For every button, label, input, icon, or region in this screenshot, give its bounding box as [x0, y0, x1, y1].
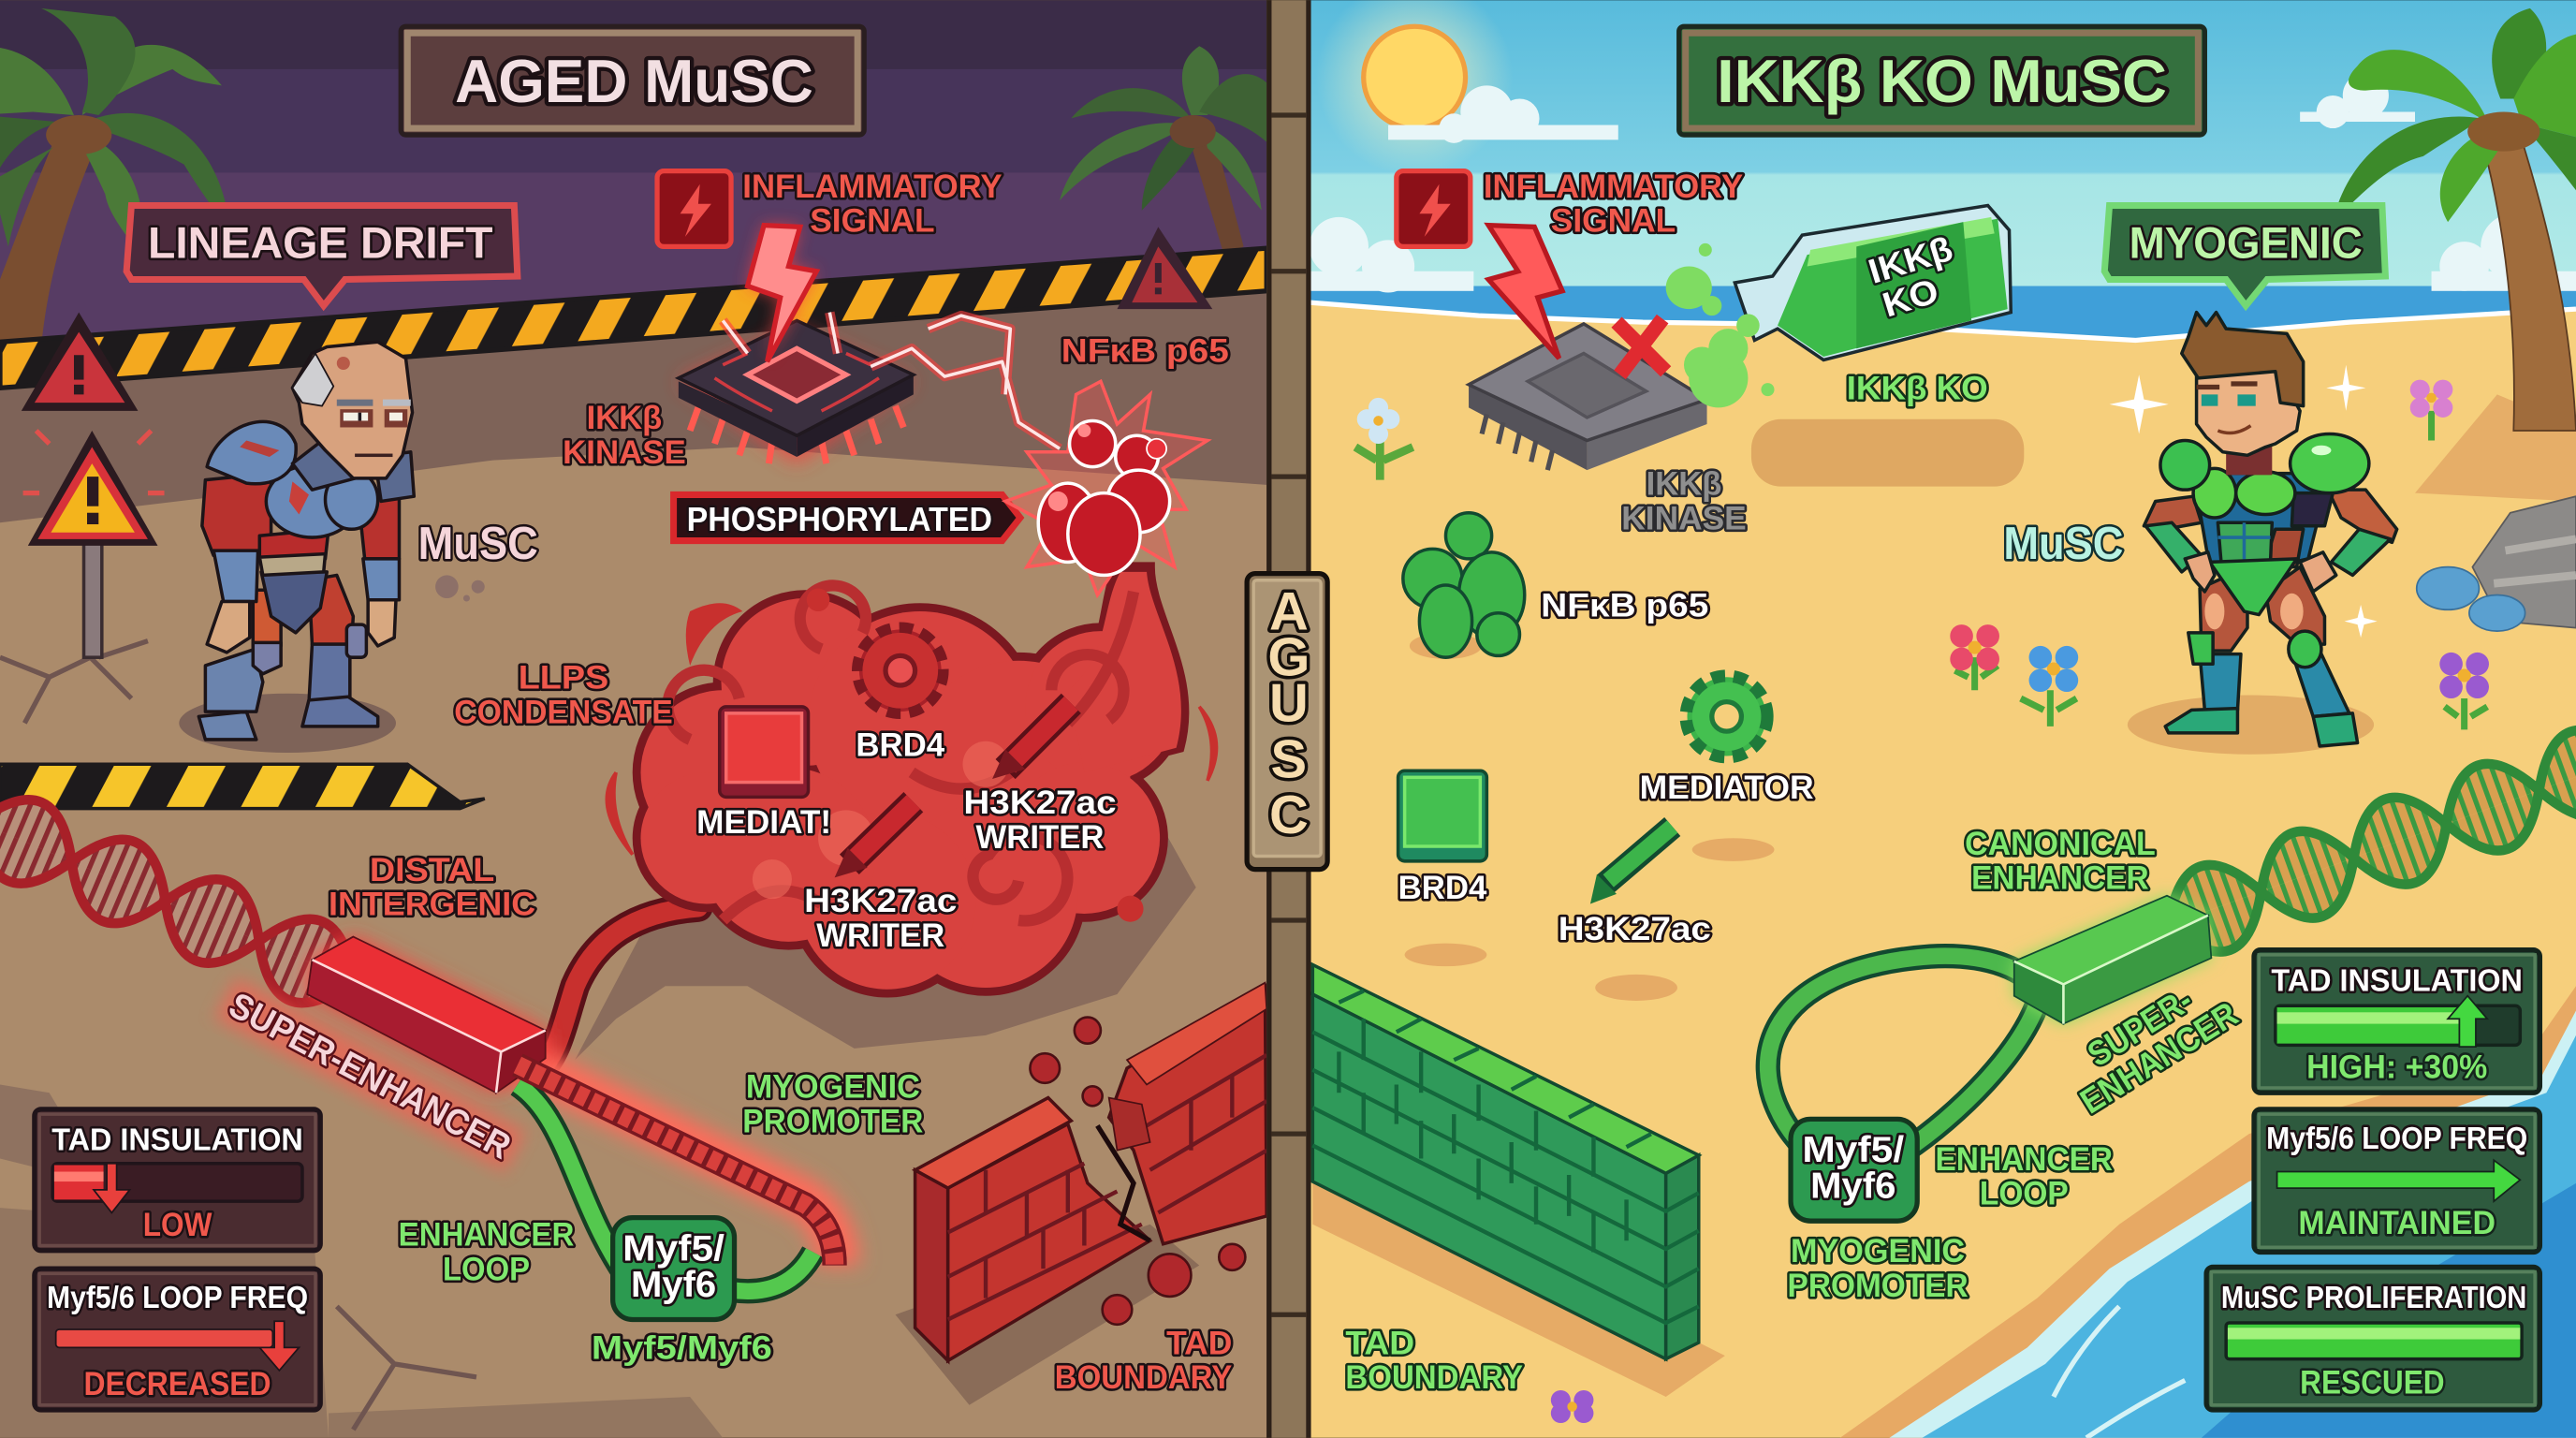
panel: TAD insulation high [2254, 950, 2539, 1093]
label: distal intergenic: DISTAL [370, 852, 494, 888]
icon: BRD4 square green [1398, 770, 1486, 861]
icon: flowers and rock [1355, 380, 2576, 1423]
hazard tape: upper [0, 248, 1266, 388]
label: LLPS condensate: CONDENSATE [454, 694, 673, 730]
label: H3K27ac writer lower: WRITER [816, 917, 944, 954]
label: MYOGENIC speech bubble: MYOGENIC [2130, 219, 2363, 269]
icon: DNA helix green [2154, 715, 2576, 967]
label: enhancer loop: ENHANCER [1936, 1141, 2113, 1178]
label: TAD boundary left: BOUNDARY [1055, 1359, 1232, 1396]
title: AGED MuSC [401, 26, 864, 135]
label: H3K27ac writer lower [804, 883, 957, 954]
icon: Myf5/Myf6 gene block [1791, 1119, 1917, 1221]
icon: red X [1617, 319, 1666, 374]
icon: Myf5/Myf6 gene block: Myf5/ [1802, 1130, 1904, 1170]
panel: Myf5/6 loop frequency maintained: Myf5/6 LOOP FREQ [2266, 1122, 2527, 1156]
icon: spilled green liquid [1666, 243, 1775, 407]
icon: gear BRD4 [859, 629, 942, 712]
icon: right palm tree [2333, 8, 2576, 431]
label: NFκB p65: NFκB p65 [1541, 587, 1708, 624]
icon: lightning bolt into chip [748, 226, 816, 361]
label: IKKβ kinase [563, 400, 686, 471]
icon: intact TAD boundary wall [1312, 964, 1725, 1397]
label: H3K27ac writer lower: H3K27ac [804, 883, 957, 919]
chart element: LLPS condensate cloud [539, 567, 1217, 1071]
label: IKKβ kinase: IKKβ [587, 400, 662, 436]
label: LLPS condensate [453, 663, 674, 726]
label: myogenic promoter: PROMOTER [1788, 1268, 1969, 1304]
panel: TAD insulation high: TAD INSULATION [2271, 963, 2523, 998]
sign: AGUSC vertical plaque: U [1269, 674, 1309, 734]
icon: H3K27ac writer pen lower [835, 802, 914, 877]
icon: mediator square [720, 707, 809, 797]
icon: warning triangle right [1117, 227, 1212, 309]
label: H3K27ac: H3K27ac [1559, 911, 1711, 947]
icon: inflammatory signal badge [657, 171, 731, 246]
icon: clouds [1310, 72, 2576, 293]
icon: super-enhancer block aged [307, 937, 546, 1093]
label: super-enhancer rotated: SUPER- [2081, 980, 2199, 1074]
panel: Myf5/6 loop frequency decreased [35, 1269, 320, 1410]
icon: inflammatory signal badge [1397, 171, 1471, 246]
label: BRD4: BRD4 [1398, 870, 1487, 906]
label: canonical enhancer: ENHANCER [1971, 860, 2149, 897]
label: canonical enhancer: CANONICAL [1965, 826, 2156, 862]
label: MYOGENIC speech bubble [2104, 206, 2385, 306]
icon: DNA helix red [0, 795, 346, 1007]
panel: TAD insulation low: LOW [143, 1207, 212, 1243]
label: H3K27ac writer upper: H3K27ac [963, 785, 1117, 821]
icon: NFκB p65 phosphorylated protein [1005, 381, 1208, 594]
icon: IKKβ KO bottle: KO [1879, 271, 1943, 324]
panel: Myf5/6 loop frequency maintained [2254, 1109, 2539, 1253]
icon: super-enhancer block green [2014, 896, 2211, 1024]
panel: TAD insulation low [35, 1109, 320, 1251]
icon: red looping rope glow [518, 1060, 838, 1266]
icon: sun [1316, 0, 1513, 176]
icon: IKKβ KO bottle: IKKβ [1864, 229, 1957, 291]
label: inflammatory signal: SIGNAL [1551, 203, 1676, 240]
label: TAD boundary right: BOUNDARY [1345, 1359, 1523, 1396]
label: IKKβ kinase: KINASE [563, 434, 686, 471]
label: IKKβ kinase: KINASE [1621, 500, 1747, 536]
panel: aged MuSC scene [0, 0, 1273, 1438]
label: H3K27ac writer upper: WRITER [976, 819, 1104, 856]
decorative pebbles [435, 575, 485, 602]
panel: MuSC proliferation rescued [2206, 1267, 2539, 1410]
label: canonical enhancer [1965, 826, 2156, 897]
label: myogenic promoter [1788, 1233, 1969, 1304]
divider: central stone column [1266, 0, 1311, 1438]
title: AGED MuSC: AGED MuSC [455, 47, 813, 115]
label: distal intergenic [328, 856, 537, 917]
title: IKKβ KO MuSC [1679, 26, 2204, 135]
label: LINEAGE DRIFT speech bubble [126, 206, 518, 306]
label: NFκB p65: NFκB p65 [1061, 332, 1229, 369]
icon: Myf5/Myf6 gene block: Myf5/ [622, 1228, 724, 1269]
label: TAD boundary left: TAD [1166, 1325, 1232, 1361]
panel: MuSC proliferation rescued: RESCUED [2300, 1364, 2445, 1401]
character: healthy MuSC hero [2128, 313, 2397, 755]
label: MuSC: MuSC [418, 519, 538, 569]
icon: H3K27ac pen green [1590, 827, 1673, 903]
label: inflammatory signal [1484, 169, 1743, 240]
icon: broken TAD boundary wall [896, 983, 1266, 1405]
label: LINEAGE DRIFT speech bubble: LINEAGE DRIFT [148, 219, 493, 269]
character: aged MuSC hero [179, 342, 414, 753]
icon: mediator gear green [1687, 677, 1766, 756]
label: myogenic promoter: MYOGENIC [746, 1069, 920, 1106]
icon: NFκB p65 healthy [1403, 513, 1525, 659]
icon: H3K27ac writer pen upper [992, 703, 1071, 779]
panel: IKKβ KO MuSC scene [1310, 0, 2576, 1438]
icon: Myf5/Myf6 gene block: Myf6 [631, 1265, 716, 1305]
label: super-enhancer rotated: ENHANCER [2073, 994, 2245, 1121]
icon: green chromatin loop aged [518, 1085, 813, 1291]
label: Myf5/Myf6: Myf5/Myf6 [592, 1330, 772, 1367]
background: dusk sky and ground [0, 0, 1266, 1438]
label: enhancer loop: LOOP [1980, 1176, 2069, 1212]
panel: TAD insulation low: TAD INSULATION [51, 1123, 303, 1158]
icon: warning road sign [23, 431, 165, 657]
icon: Myf5/Myf6 gene block: Myf6 [1810, 1167, 1895, 1207]
icon: warning triangle on tape [22, 313, 138, 411]
label: enhancer loop [1936, 1141, 2113, 1212]
label: inflammatory signal: SIGNAL [810, 203, 935, 240]
sign: AGUSC vertical plaque [1247, 574, 1327, 870]
label: H3K27ac writer upper [963, 785, 1117, 856]
label: TAD boundary right: TAD [1345, 1325, 1414, 1361]
icon: inactive IKKβ kinase chip [1469, 324, 1707, 470]
label: myogenic promoter [742, 1069, 923, 1139]
label: inflammatory signal: INFLAMMATORY [1484, 169, 1743, 205]
label: enhancer loop [399, 1217, 574, 1287]
label: mediator cut off: MEDIAT! [696, 804, 831, 841]
sign: AGUSC vertical plaque: S [1271, 729, 1307, 789]
decorative sparkles [2110, 365, 2378, 638]
label: distal intergenic: INTERGENIC [329, 887, 535, 923]
label: MuSC: MuSC [2003, 519, 2123, 569]
label: enhancer loop: ENHANCER [399, 1217, 574, 1254]
icon: left palm tree [0, 8, 230, 353]
label: IKKβ kinase [1621, 465, 1747, 536]
panel: Myf5/6 loop frequency maintained: MAINTAINED [2298, 1205, 2496, 1241]
label: MEDIATOR: MEDIATOR [1640, 770, 1814, 806]
label: inflammatory signal: INFLAMMATORY [742, 169, 1003, 205]
panel: TAD insulation high: HIGH: +30% [2306, 1049, 2487, 1085]
icon: IKKβ kinase chip active [679, 320, 914, 463]
icon: right palm tree [1060, 46, 1273, 255]
sign: AGUSC vertical plaque: G [1267, 627, 1310, 687]
sign: AGUSC vertical plaque: C [1269, 785, 1309, 845]
hazard tape: lower [0, 764, 485, 809]
label: LLPS condensate: LLPS [519, 660, 608, 697]
label: myogenic promoter: MYOGENIC [1791, 1233, 1965, 1269]
icon: blocked bolt [1488, 226, 1562, 359]
panel: Myf5/6 loop frequency decreased: DECREASED [84, 1366, 271, 1402]
label: phosphorylated tag: PHOSPHORYLATED [687, 500, 992, 538]
label: enhancer loop: LOOP [443, 1251, 530, 1287]
sign: AGUSC vertical plaque: A [1269, 581, 1309, 641]
icon: Myf5/Myf6 gene block [613, 1218, 735, 1319]
label: BRD4: BRD4 [856, 726, 945, 763]
label: TAD boundary right [1345, 1325, 1523, 1396]
icon: IKKβ KO bottle [1734, 206, 2011, 360]
title: IKKβ KO MuSC: IKKβ KO MuSC [1717, 47, 2167, 115]
label: inflammatory signal [742, 172, 1004, 234]
label: IKKβ KO: IKKβ KO [1847, 371, 1988, 407]
label: myogenic promoter: PROMOTER [742, 1103, 923, 1139]
panel: Myf5/6 loop frequency decreased: Myf5/6 LOOP FREQ [47, 1281, 308, 1315]
label: IKKβ kinase: IKKβ [1647, 465, 1721, 502]
label: TAD boundary left [1055, 1325, 1232, 1396]
icon: red chromatin strand [518, 1064, 835, 1266]
panel: MuSC proliferation rescued: MuSC PROLIFERATION [2221, 1281, 2526, 1315]
background: sunny sky, sea and sand [1310, 0, 2576, 1438]
arrow: electric arc to NFκB [723, 313, 1060, 448]
label: super-enhancer: SUPER-ENHANCER [223, 985, 517, 1167]
icon: green loop [1768, 956, 2041, 1158]
